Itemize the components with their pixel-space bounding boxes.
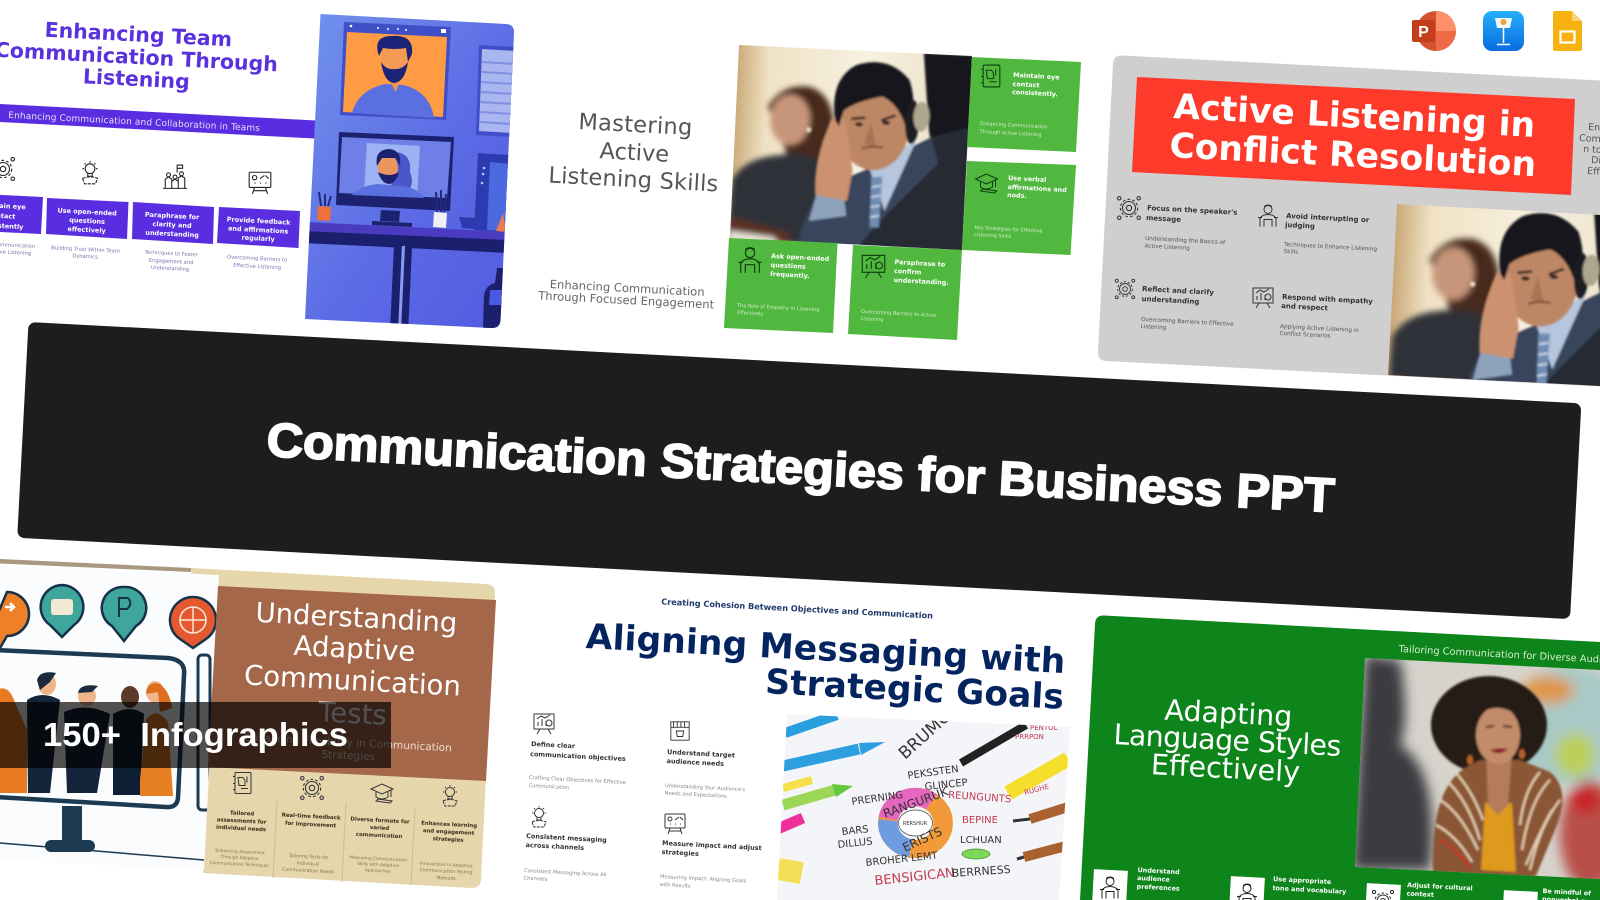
purple strategy boxes with captions: Building Trust Within Team [51, 245, 120, 255]
photo: mind map with coloured pens: PEKSSTEN [907, 764, 959, 782]
figure four [140, 713, 173, 796]
green card: open-ended questions: The Role of Empathy in Listening [736, 303, 820, 313]
column: tailored assessments: Through Adaptive [219, 854, 259, 862]
item: avoid interrupting or judging: judging [1284, 221, 1315, 231]
column: enhances learning: and engagement [423, 828, 475, 837]
purple strategy boxes with captions: Overcoming Barriers to [227, 254, 287, 264]
green card: maintain eye contact: Maintain eye [1013, 71, 1060, 81]
item: define clear communication objectives: communication objectives [530, 750, 626, 763]
photo: man listening with headphones [727, 43, 974, 253]
green card: paraphrase: Paraphrase to [894, 258, 946, 269]
purple strategy boxes with captions [0, 193, 300, 273]
green card: maintain eye contact: Through Active Listening [978, 129, 1042, 138]
green card: maintain eye contact: Enhancing Communication [980, 121, 1047, 131]
item: avoid interrupting or judging: Techniques to Enhance Listening [1283, 242, 1378, 253]
subtitle: flexibility in communication strategies: Strategies [321, 749, 375, 763]
slide title: Understanding Adaptive Communication Tests: Understanding [255, 597, 458, 639]
slide title: Understanding Adaptive Communication Tests: Communication [243, 659, 462, 703]
column: diverse formats [349, 784, 410, 875]
red title banner: Active Listening in [1173, 87, 1536, 146]
panel: Enhancing Team Communication slide [0, 10, 520, 335]
photo: mind map with coloured pens: BRUMG [895, 706, 956, 764]
slide title: Enhancing Team Communication Through Listening [0, 18, 278, 94]
subtitle: Enhancing Communication Through Focused Engagement: Through Focused Engagement [537, 288, 715, 312]
item: use appropriate tone and vocabulary: Use appropriate [1273, 875, 1332, 886]
photo: mind map with coloured pens: DILLUS [837, 836, 873, 851]
item: focus on the speaker's message: message [1146, 214, 1181, 224]
grey slide background [1098, 55, 1600, 386]
column: enhances learning: Communication Testing [420, 867, 473, 876]
photo: mind map with coloured pens: PENTOL [1030, 724, 1058, 732]
item: reflect and clarify understanding: Reflect and clarify [1142, 285, 1215, 297]
green card: open-ended questions: Ask open-ended [771, 252, 830, 263]
item: measure impact and adjust strategies: with Results [659, 882, 691, 890]
slide title: Mastering Active Listening Skills: Mastering [578, 109, 693, 141]
panel: Mastering Active Listening Skills slide [537, 43, 1081, 340]
green card: open-ended questions: frequently. [770, 270, 810, 280]
purple strategy boxes with captions: Effective Listening [233, 263, 281, 271]
slide title: Aligning Messaging with Strategic Goals: Strategic Goals [764, 662, 1065, 718]
item: be mindful of nonverbal cues: Be mindful of [1542, 887, 1591, 898]
item: avoid interrupting or judging [1258, 205, 1378, 256]
panel: Aligning Messaging with Strategic Goals slide [523, 596, 1075, 900]
purple strategy boxes with captions: effectively [67, 225, 107, 235]
item: adjust for cultural context: Adjust for cultural [1407, 881, 1473, 892]
green card: verbal affirmations: Listening Skills [974, 232, 1012, 240]
item: measure impact and adjust strategies: Measure impact and adjust [662, 839, 762, 852]
column: diverse formats: Approaches [365, 867, 391, 875]
slide title: Understanding Adaptive Communication Tests [243, 597, 462, 732]
green card: paraphrase [848, 245, 962, 340]
column: diverse formats: Measuring Communication [349, 854, 407, 864]
slide title: Understanding Adaptive Communication Tests: Tests [316, 696, 388, 732]
green card: maintain eye contact: consistently. [1012, 88, 1058, 98]
column: real-time feedback: for improvement [285, 821, 337, 829]
item: understand target audience needs: Understand target [667, 748, 735, 760]
photo: mind map with coloured pens [770, 706, 1075, 900]
column: tailored assessments: Communication Techniques [209, 860, 269, 869]
green card: open-ended questions: Effectively [737, 310, 763, 317]
subtitle: Enhancing Communication Through Focused Engagement [537, 277, 715, 312]
figure two [64, 707, 110, 793]
slide title: Aligning Messaging with Strategic Goals: Aligning Messaging with [585, 617, 1066, 682]
photo: man listening with headphones [1388, 204, 1600, 386]
item: measure impact and adjust strategies: Measuring Impact: Aligning Goals [660, 874, 747, 885]
photo: mind map with coloured pens: BROHER LEMT [865, 850, 939, 869]
purple strategy boxes with captions: Use open-ended [57, 206, 117, 218]
slide title: Mastering Active Listening Skills: Listening Skills [548, 163, 719, 197]
slide title: Enhancing Team Communication Through Listening: Listening [82, 64, 190, 94]
purple strategy boxes with captions: Techniques to Foster [143, 250, 199, 258]
column: tailored assessments: assessments for [217, 817, 267, 826]
item: focus on the speaker's message: Active Listening [1144, 244, 1190, 252]
item: adjust for cultural context [1365, 881, 1473, 900]
green card: verbal affirmations: Key Strategies for Effective [974, 225, 1043, 235]
icon: presentation board [249, 172, 271, 194]
column: diverse formats: communication [356, 832, 403, 840]
photo: mind map with coloured pens: RANGURUK [881, 784, 951, 821]
brown title panel [208, 586, 496, 781]
icon: team with flag [163, 165, 187, 188]
item: reflect and clarify understanding [1115, 279, 1234, 331]
photo: mind map with coloured pens: PRRPON [1015, 733, 1044, 741]
item: understand audience preferences: audience [1137, 874, 1171, 884]
item: reflect and clarify understanding: Listening [1140, 324, 1167, 331]
cropped side text [1579, 122, 1600, 180]
photo: mind map with coloured pens: PRERNING [851, 790, 904, 808]
photo: mind map with coloured pens: RUGHE [1023, 783, 1050, 797]
icon: light bulb [82, 161, 98, 184]
photo: mind map with coloured pens: ERISTS [900, 824, 944, 855]
purple strategy boxes with captions: Provide feedback [227, 215, 291, 227]
slide title: Adapting Language Styles Effectively [1113, 694, 1342, 789]
icon: gear with people [0, 158, 14, 180]
column: real-time feedback: Tailoring Tests for [287, 853, 329, 861]
item: respond with empathy and respect: Applying Active Listening in [1280, 324, 1359, 334]
column dividers [273, 800, 415, 885]
item: be mindful of nonverbal cues [1502, 887, 1597, 900]
photo: mind map with coloured pens: GLINCEP [924, 778, 968, 793]
photo: mind map with coloured pens: REUNGUNTS [948, 790, 1011, 805]
green card: paraphrase: Listening [860, 316, 883, 323]
item: understand target audience needs: Understanding Your Audience's [665, 783, 746, 793]
column: diverse formats: Skills with Adaptive [357, 861, 399, 869]
slide title: Understanding Adaptive Communication Tests: Adaptive [293, 630, 416, 668]
purple strategy boxes with captions: and affirmations [228, 224, 289, 236]
green card: verbal affirmations: affirmations and [1007, 183, 1067, 194]
item: focus on the speaker's message: Focus on the speaker's [1147, 204, 1238, 217]
item: consistent messaging across channels: Channels [523, 876, 548, 883]
green card: verbal affirmations: nods. [1007, 191, 1027, 200]
item: measure impact and adjust strategies [659, 814, 762, 890]
icon: PowerPoint [1412, 11, 1456, 51]
purple strategy boxes with captions: clarity and [152, 220, 192, 230]
small heading: Creating Cohesion Between Objectives and Communication [661, 596, 933, 621]
item: consistent messaging across channels: Consistent Messaging Across All [524, 868, 607, 878]
column: tailored assessments: Enhancing Assessment [215, 848, 265, 856]
badge: 150+ Infographics: 150+ Infographics [43, 716, 348, 753]
column: real-time feedback: Individual [297, 860, 319, 868]
icon: PowerPoint: P [1418, 24, 1429, 41]
illustration: business team on a monitor with speech bubbles [0, 560, 222, 875]
item: adjust for cultural context: context [1406, 890, 1434, 899]
column: tailored assessments [209, 772, 269, 869]
icon: Google Slides [1553, 11, 1582, 51]
item: reflect and clarify understanding: Overcoming Barriers to Effective [1141, 317, 1234, 328]
green card: open-ended questions: questions [770, 261, 806, 271]
item: respond with empathy and respect: and respect [1281, 302, 1329, 312]
item: understand target audience needs: audience needs [666, 757, 724, 768]
column: real-time feedback: Communication Needs [282, 867, 335, 875]
green card: paraphrase: confirm [894, 267, 922, 276]
photo: mind map with coloured pens: BEPINE [962, 815, 998, 826]
photo: mind map with coloured pens: BARS [841, 824, 869, 838]
item: avoid interrupting or judging: Avoid interrupting or [1286, 212, 1370, 224]
purple subtitle band [0, 104, 316, 138]
item: consistent messaging across channels: Consistent messaging [526, 832, 607, 844]
slide title: Adapting Language Styles Effectively: Effectively [1150, 748, 1301, 789]
panel: Adapting Language Styles Effectively slide [1080, 615, 1600, 900]
panel: Understanding Adaptive Communication Tests slide [0, 559, 496, 888]
column: diverse formats: varied [370, 825, 389, 832]
slide title: Adapting Language Styles Effectively: Adapting [1164, 694, 1293, 733]
item: consistent messaging across channels: across channels [525, 841, 584, 852]
item: respond with empathy and respect [1253, 288, 1373, 340]
item: consistent messaging across channels [523, 806, 607, 883]
purple subtitle band: Enhancing Communication and Collaboration in Teams [8, 111, 260, 134]
item: understand target audience needs: Needs and Expectations [664, 791, 727, 800]
column: tailored assessments: Tailored [230, 810, 254, 818]
item: understand audience preferences: Understand [1137, 866, 1180, 876]
column: enhances learning: strategies [432, 836, 464, 844]
icon: Keynote [1483, 11, 1524, 51]
figure one [27, 695, 60, 793]
green card: paraphrase: Overcoming Barriers to Active [861, 309, 936, 319]
red title banner [1132, 77, 1575, 195]
column: tailored assessments: individual needs [216, 825, 266, 833]
item: understand audience preferences [1092, 866, 1180, 900]
item: define clear communication objectives: Crafting Clear Objectives for Effective [529, 775, 626, 786]
green card: paraphrase: understanding. [893, 276, 949, 287]
photo: woman speaking in front of a globe [1350, 650, 1600, 890]
purple strategy boxes with captions: Engagement and [149, 258, 193, 266]
item: respond with empathy and respect: Conflict Scenarios [1279, 331, 1331, 340]
purple strategy boxes with captions: understanding [145, 229, 199, 239]
item: use appropriate tone and vocabulary [1229, 875, 1347, 900]
photo: mind map with coloured pens: BERRNESS [951, 863, 1011, 880]
purple strategy boxes with captions: questions [69, 216, 105, 226]
green card: maintain eye contact: contact [1012, 80, 1040, 89]
purple strategy boxes with captions: Dynamics [72, 253, 98, 261]
green card: open-ended questions [724, 238, 838, 333]
column: enhances learning: Enhances learning [421, 821, 477, 829]
slide title: Aligning Messaging with Strategic Goals [585, 617, 1066, 718]
item: define clear communication objectives: Communication [528, 783, 569, 791]
item: measure impact and adjust strategies: strategies [661, 848, 699, 858]
column: enhances learning: Methods [436, 875, 456, 882]
green slide background [1080, 615, 1600, 900]
item: reflect and clarify understanding: understanding [1141, 295, 1200, 306]
column: real-time feedback: Real-time feedback [281, 812, 341, 822]
mind map donut [884, 793, 947, 853]
green card: verbal affirmations [962, 161, 1076, 255]
slide title: Mastering Active Listening Skills [548, 109, 719, 197]
tan slide background [0, 559, 495, 888]
slide title: Enhancing Team Communication Through Listening: Enhancing Team [44, 18, 233, 51]
column: enhances learning: Innovations in Adaptive [419, 861, 473, 869]
item: use appropriate tone and vocabulary: tone and vocabulary [1272, 884, 1347, 896]
column: real-time feedback [281, 777, 341, 875]
item: respond with empathy and respect: Respond with empathy [1282, 293, 1373, 306]
column: enhances learning [419, 785, 477, 882]
purple strategy boxes with captions: regularly [241, 234, 276, 243]
slide title: Enhancing Team Communication Through Listening: Communication Through [0, 38, 278, 76]
purple strategy boxes with captions: Understanding [151, 265, 189, 273]
photo: mind map with coloured pens: LCHUAN [960, 835, 1002, 846]
illustration: video call on monitors [300, 10, 520, 335]
slide title: Mastering Active Listening Skills: Active [599, 138, 670, 168]
left partial figure [0, 688, 27, 793]
slide title: Adapting Language Styles Effectively: Language Styles [1113, 718, 1342, 763]
item: define clear communication objectives: Define clear [531, 740, 576, 750]
green card: maintain eye contact [967, 57, 1081, 152]
item: focus on the speaker's message: Understanding the Basics of [1145, 236, 1226, 246]
item: understand audience preferences: preferences [1136, 883, 1180, 893]
panel: Active Listening in Conflict Resolution slide [1098, 55, 1600, 414]
green card: verbal affirmations: Use verbal [1008, 174, 1047, 184]
subtitle: Enhancing Communication Through Focused Engagement: Enhancing Communication [549, 277, 705, 299]
red title banner: Conflict Resolution [1169, 126, 1537, 185]
column: diverse formats: Diverse formats for [350, 816, 410, 826]
main title: Communication Strategies for Business PPT: Communication Strategies for Business PPT [265, 414, 1336, 523]
item: avoid interrupting or judging: Skills [1283, 249, 1298, 256]
badge: 150+ Infographics [0, 702, 391, 768]
photo: mind map with coloured pens: RERSHUR [903, 821, 928, 827]
photo: mind map with coloured pens: BENSIGICAN [874, 866, 956, 889]
item: understand target audience needs [664, 722, 746, 800]
purple strategy boxes with captions: Paraphrase for [145, 211, 200, 221]
item: focus on the speaker's message [1118, 197, 1238, 252]
item: define clear communication objectives [528, 714, 626, 791]
figure three [113, 709, 144, 795]
black title band [17, 322, 1581, 619]
subtitle: flexibility in communication strategies: Enhancing Flexibility in Communication [244, 732, 452, 754]
